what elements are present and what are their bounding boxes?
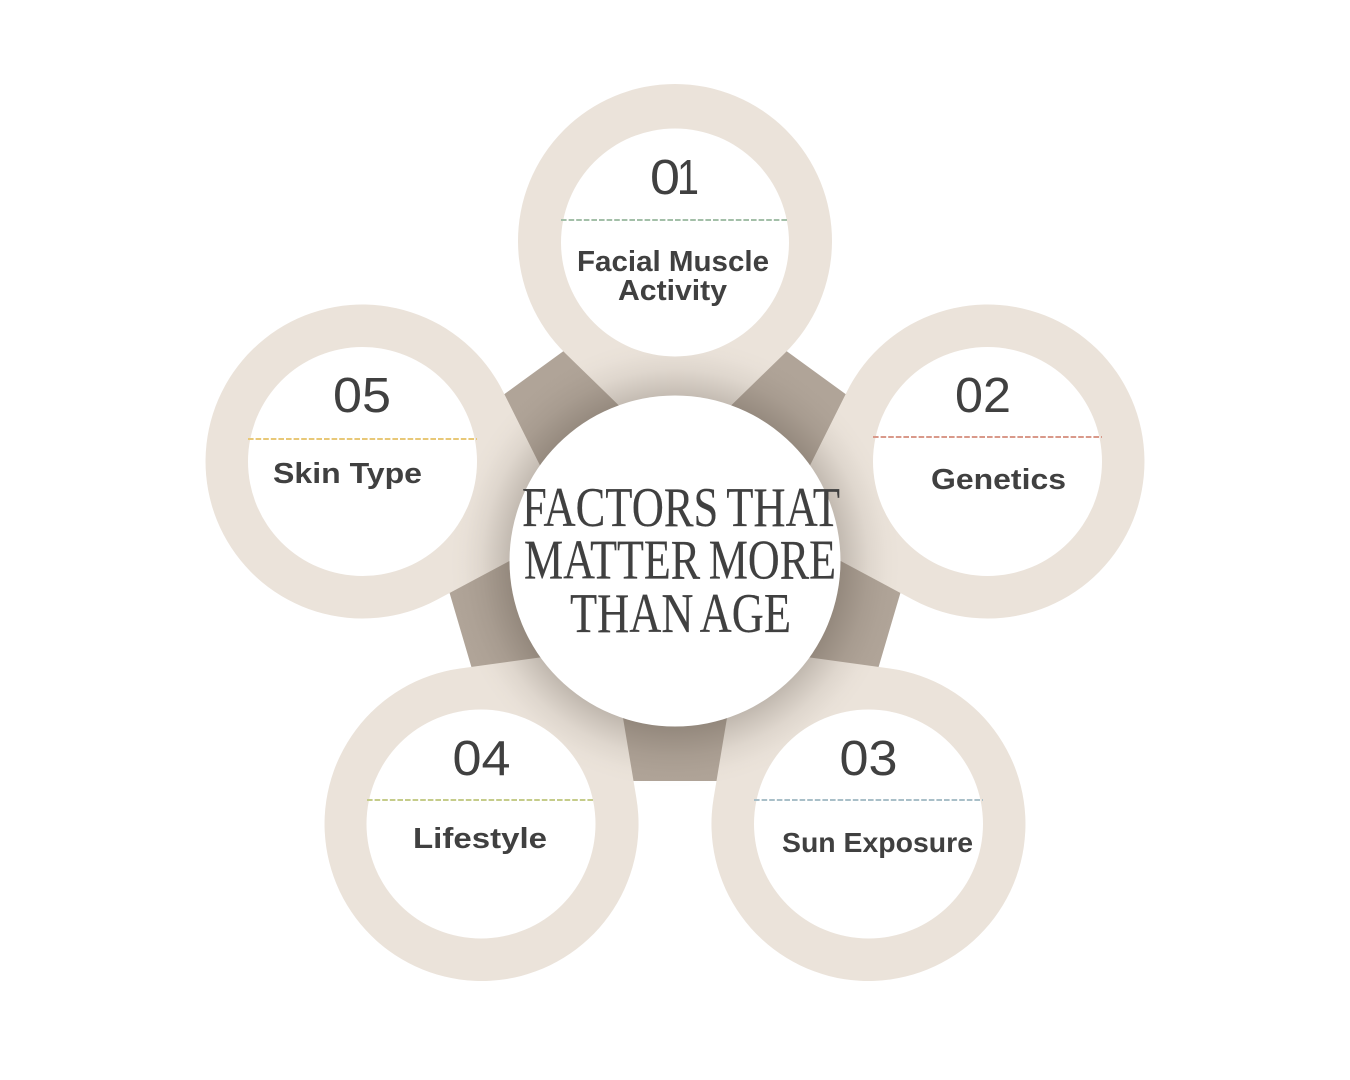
factor 05 xyxy=(248,369,477,490)
factor 04 xyxy=(367,732,595,855)
factor 03 xyxy=(754,732,983,858)
pentagon backdrop xyxy=(411,270,939,781)
factor 01: 1 xyxy=(677,151,699,205)
title: MATTER MORE xyxy=(524,530,836,592)
ring 5 outline xyxy=(206,305,571,619)
factor 01: Activity xyxy=(618,275,727,307)
ring 2 outline xyxy=(779,305,1144,619)
ring 1 outline xyxy=(518,84,832,460)
factor 04: 04 xyxy=(452,732,510,786)
title xyxy=(522,477,840,645)
title: FACTORS THAT xyxy=(522,477,840,539)
ring tabs xyxy=(206,84,1144,981)
factor 01: Facial Muscle xyxy=(577,246,769,278)
factor 04: Lifestyle xyxy=(413,823,547,855)
factor 03: Sun Exposure xyxy=(782,827,973,858)
factor 01: 0 xyxy=(650,151,680,205)
factor 03: 03 xyxy=(840,732,898,786)
centre circle xyxy=(510,396,840,726)
factor 05: Skin Type xyxy=(273,458,422,490)
ring 3 outline xyxy=(711,648,1025,981)
factor 02 xyxy=(873,369,1102,496)
factor 02: 02 xyxy=(955,369,1011,423)
factor 02: Genetics xyxy=(931,464,1066,496)
ring 4 outline xyxy=(325,648,639,981)
title: THAN AGE xyxy=(570,583,791,645)
factor 05: 05 xyxy=(333,369,391,423)
centre circle shadow xyxy=(450,338,900,788)
factor 01 xyxy=(561,151,789,307)
inner white discs xyxy=(248,128,1102,938)
